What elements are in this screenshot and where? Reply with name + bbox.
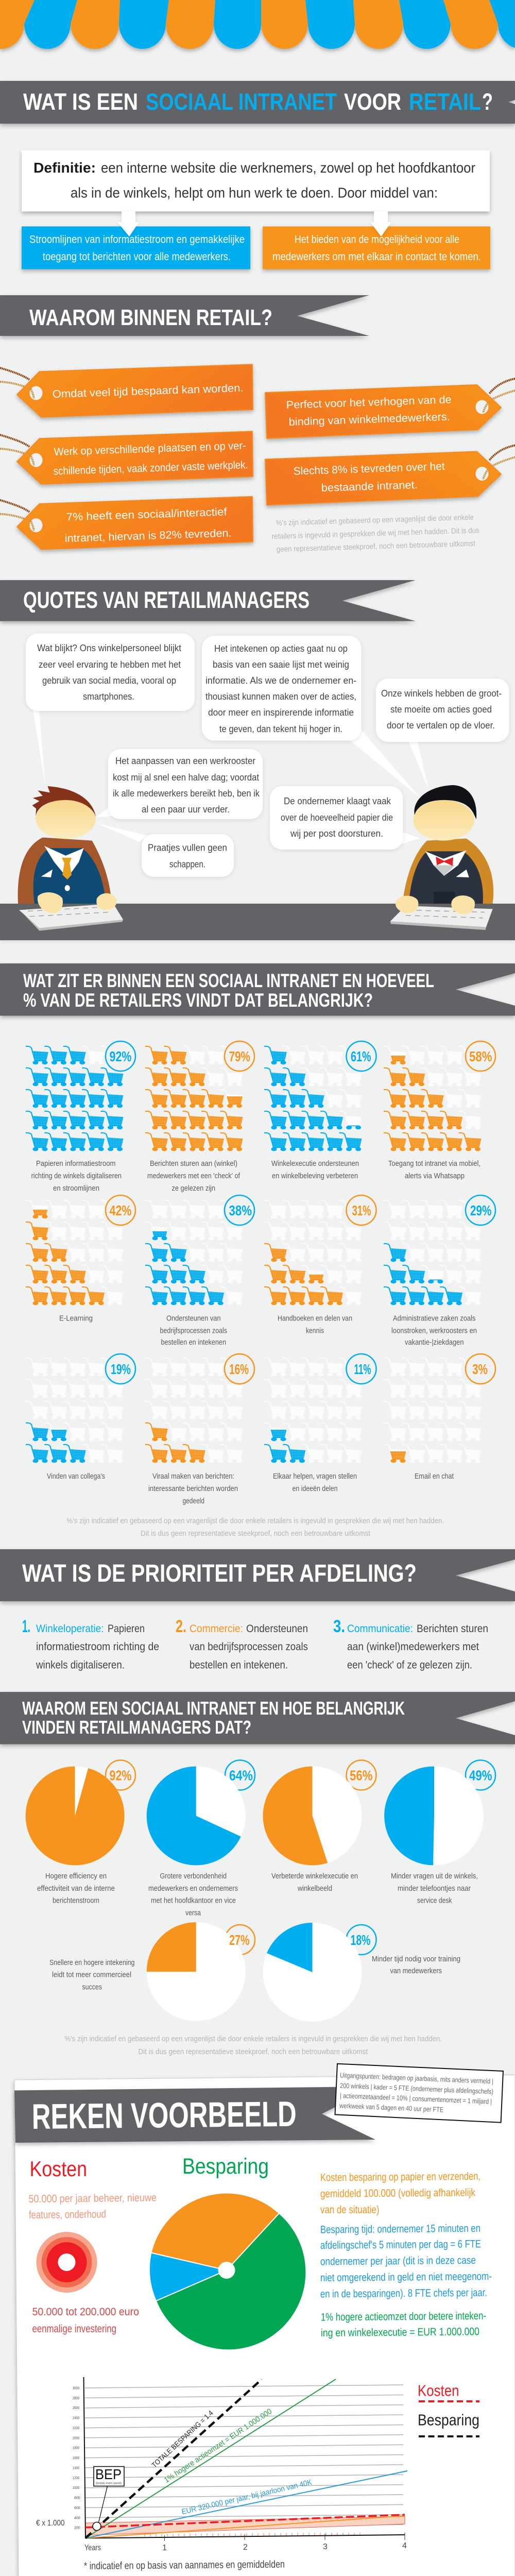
chart: break even: Years <box>84 2544 101 2552</box>
panel: elkaar helpen 11%: en ideeën delen <box>293 1484 338 1493</box>
priority 2: commercie: bestellen en intekenen. <box>190 1659 288 1671</box>
panel: administratieve zaken 29%: loonstroken, werkroosters en <box>391 1326 477 1335</box>
priority 3: communicatie: Communicatie: <box>347 1623 413 1635</box>
heading: wat is een sociaal intranet voor retail: ? <box>482 89 493 115</box>
pie: winkelexecutie 56%: 56% <box>350 1767 373 1784</box>
chart: break even: 1 <box>162 2544 167 2552</box>
panel: handboeken 31% <box>264 1195 376 1335</box>
priority 1: winkeloperatie: Papieren <box>108 1623 145 1635</box>
pie: verbondenheid 64%: versa <box>185 1908 201 1918</box>
panel: winkelexecutie 61%: en winkelbeleving verbeteren <box>272 1172 358 1180</box>
quote: papier: De ondernemer klaagt vaak <box>284 796 391 806</box>
pie: intekening 27%: Snellere en hogere intekening <box>49 1958 135 1967</box>
tag: 8 procent: Slechts 8% is tevreden over het <box>293 461 445 477</box>
quote: acties vertalen: Onze winkels hebben de groot- <box>381 688 502 699</box>
quote: intekenen: informatie. Als we de ondernemer en- <box>205 675 356 686</box>
quote: winkelpersoneel: Wat blijkt? Ons winkelpersoneel blijkt <box>37 643 181 653</box>
panel: contact: Het bieden van de mogelijkheid voor alle <box>295 234 459 245</box>
panel: vinden van collega's 19%: 19% <box>111 1361 131 1377</box>
priority 2: commercie: Ondersteunen <box>246 1623 308 1635</box>
panel: winkelexecutie 61%: Winkelexecutie ondersteunen <box>271 1159 359 1168</box>
quote: intekenen: door meer en inspirerende informatie <box>208 707 354 718</box>
callout: BEP <box>93 2466 124 2531</box>
heading: waarom binnen retail: WAAROM BINNEN RETAIL? <box>29 305 272 330</box>
column: kosten <box>28 2157 157 2335</box>
panel: handboeken 31%: Handboeken en delen van <box>278 1314 352 1323</box>
column: besparing pie: Besparing <box>182 2154 269 2179</box>
panel: bedrijfsprocessen 38% <box>145 1195 254 1347</box>
callout: BEP: BEP <box>95 2466 122 2482</box>
tag: tijd: Omdat veel tijd bespaard kan worden. <box>52 382 244 400</box>
legend: kosten / besparing: Besparing <box>418 2411 479 2429</box>
column: kosten: eenmalige investering <box>32 2323 116 2335</box>
arrow: left <box>117 211 139 236</box>
chart: break even: 1% hogere actieomzet = EUR 1.000.000 <box>163 2407 273 2485</box>
pie: winkelexecutie 56% <box>263 1760 376 1893</box>
chart: break even: 600 <box>74 2506 80 2510</box>
quote: intekenen <box>202 636 420 798</box>
priority 2: commercie <box>176 1617 308 1671</box>
panel: papieren informatiestroom 92%: richting de winkels digitaliseren <box>31 1172 122 1180</box>
pie: winkelexecutie 56%: winkelbeeld <box>297 1884 332 1893</box>
panel: administratieve zaken 29%: vakantie-|ziekdagen <box>405 1338 464 1347</box>
chart: break even: 1600 <box>73 2456 79 2460</box>
footnote: tags: geen representatieve steekproef, noch een betrouwbare uitkomst <box>277 539 476 554</box>
footnote: carts: Dit is dus geen representatieve steekproef, noch een betrouwbare uitkomst <box>141 1529 371 1538</box>
panel: winkelexecutie 61% <box>264 1041 376 1180</box>
panel: papieren informatiestroom 92%: en stroomlijnen <box>53 1184 99 1193</box>
panel: stroomlijnen: toegang tot berichten voor alle medewerkers. <box>43 251 231 263</box>
column: besparing pie <box>149 2154 306 2350</box>
heading: wat is een sociaal intranet voor retail: SOCIAAL INTRANET <box>146 89 337 115</box>
quote: acties vertalen: ste moeite om acties goed <box>390 704 492 715</box>
heading: wat is een sociaal intranet voor retail: WAT IS EEN <box>23 89 138 115</box>
panel: elkaar helpen 11%: Elkaar helpen, vragen stellen <box>273 1472 357 1481</box>
pie: efficiency 92% <box>26 1760 135 1905</box>
chart: break even: 2400 <box>73 2417 79 2420</box>
panel: reken voorbeeld sheet <box>14 2075 515 2576</box>
footnote: tags <box>272 513 479 554</box>
tag: 8 procent <box>265 445 515 505</box>
panel: viraal 16%: Viraal maken van berichten: <box>152 1472 234 1481</box>
quote: intekenen: Het intekenen op acties gaat nu op <box>214 643 348 654</box>
awning <box>0 0 515 49</box>
chart: break even <box>36 2377 407 2572</box>
panel: e-learning 42%: E-Learning <box>59 1314 93 1323</box>
panel: definitie: een interne website die werknemers, zowel op het hoofdkantoor <box>101 160 475 176</box>
chart: break even: 400 <box>74 2516 80 2520</box>
panel: contact: medewerkers om met elkaar in contact te komen. <box>272 251 481 263</box>
quote: winkelpersoneel: gebruik van social media, vooral op <box>42 675 176 686</box>
panel: papieren informatiestroom 92%: Papieren informatiestroom <box>36 1159 115 1168</box>
pie: minder vragen 49%: 49% <box>469 1767 492 1784</box>
footnote: carts: %'s zijn indicatief en gebaseerd op een vragenlijst die door enkele retailers is ingevuld in gesprekken die wij met hen hadden. <box>67 1517 444 1525</box>
panel: bedrijfsprocessen 38%: bedrijfsprocessen zoals <box>160 1326 227 1335</box>
tag: binding: Perfect voor het verhogen van de <box>286 394 452 411</box>
pie: minder vragen 49%: Minder vragen uit de winkels, <box>391 1872 478 1880</box>
heading: reken voorbeeld: REKEN VOORBEELD <box>31 2094 297 2137</box>
text: besparing tijd: ondernemer per jaar (dit is in deze case <box>320 2255 476 2267</box>
text: besparing tijd <box>320 2223 492 2300</box>
pie: efficiency 92%: effectiviteit van de interne <box>37 1884 115 1893</box>
chart: break even: * indicatief en op basis van aannames en gemiddelden <box>84 2559 285 2572</box>
footnote: pies: %'s zijn indicatief en gebaseerd op een vragenlijst die door enkele retailers is ingevuld in gesprekken die wij met hen hadden. <box>65 2035 442 2043</box>
panel: bedrijfsprocessen 38%: 38% <box>229 1202 252 1218</box>
footnote: tags: retailers is ingevuld in gesprekken die wij met hen hadden. Dit is dus <box>272 526 479 541</box>
panel: toegang mobiel 58%: 58% <box>469 1048 492 1064</box>
pie: minder vragen 49%: minder telefoontjes naar <box>398 1884 471 1893</box>
quote: acties vertalen <box>376 679 509 789</box>
pie: intekening 27%: 27% <box>229 1932 250 1948</box>
panel: elkaar helpen 11%: 11% <box>354 1361 371 1377</box>
quote: intekenen: thousiast kunnen maken over de acties, <box>205 691 356 702</box>
priority 3: communicatie: aan (winkel)medewerkers met <box>347 1641 479 1653</box>
panel: toegang mobiel 58%: Toegang tot intranet via mobiel, <box>388 1159 480 1168</box>
priority 2: commercie: 2. <box>176 1617 186 1636</box>
pie: verbondenheid 64%: medewerkers en ondernemers <box>148 1884 238 1893</box>
pie: intekening 27%: succes <box>82 1982 102 1992</box>
quote: winkelpersoneel <box>26 634 195 786</box>
person: right manager <box>390 785 493 930</box>
priority 1: winkeloperatie: 1. <box>22 1617 30 1636</box>
heading: wat is een sociaal intranet voor retail: VOOR <box>344 89 401 115</box>
tag: werkplek <box>0 431 253 484</box>
panel: definitie <box>22 150 490 211</box>
panel: toegang mobiel 58%: alerts via Whatsapp <box>405 1172 465 1180</box>
heading: waarom binnen retail <box>0 295 369 336</box>
tag: binding <box>265 379 515 438</box>
text: kostenbesparing: van de situatie) <box>320 2204 379 2216</box>
panel: viraal 16%: gedeeld <box>182 1497 204 1505</box>
arrow: right <box>370 211 391 236</box>
quote: werkrooster: Het aanpassen van een werkrooster <box>115 756 255 766</box>
tag: binding: binding van winkelmedewerkers. <box>288 411 450 428</box>
heading: waarom een sociaal intranet <box>0 1692 515 1744</box>
panel: viraal 16% <box>145 1354 254 1505</box>
footnote: carts <box>67 1517 444 1538</box>
tag: 7 procent: 7% heeft een sociaal/interactief <box>66 506 227 523</box>
panel: berichten sturen 79%: ze gelezen zijn <box>172 1184 215 1193</box>
panel: e-learning 42% <box>26 1195 135 1323</box>
callout: BEP: (break even point) <box>96 2482 122 2485</box>
heading: wat zit er binnen: % VAN DE RETAILERS VINDT DAT BELANGRIJK? <box>23 990 373 1011</box>
priority 3: communicatie <box>333 1617 488 1671</box>
quote: praatjes <box>97 823 234 877</box>
heading: quotes <box>0 580 416 621</box>
panel: vinden van collega's 19%: Vinden van collega's <box>47 1472 105 1481</box>
quote: intekenen: basis van een saaie lijst met weinig <box>213 659 349 670</box>
panel: administratieve zaken 29% <box>384 1195 495 1347</box>
column: kosten: 50.000 tot 200.000 euro <box>32 2306 139 2318</box>
quote: praatjes: Praatjes vullen geen <box>148 843 227 853</box>
pie: minder vragen 49% <box>384 1760 495 1905</box>
priority 2: commercie: van bedrijfsprocessen zoals <box>190 1641 308 1653</box>
panel: papieren informatiestroom 92% <box>26 1041 135 1193</box>
pie: minder vragen 49%: service desk <box>417 1896 452 1905</box>
heading: prioriteit per afdeling: WAT IS DE PRIORITEIT PER AFDELING? <box>22 1560 417 1587</box>
pie: training 18%: van medewerkers <box>390 1967 442 1975</box>
priority 1: winkeloperatie: Winkeloperatie: <box>36 1623 104 1635</box>
heading: prioriteit per afdeling <box>0 1549 515 1601</box>
text: actieomzet: ing en winkelexecutie = EUR 1.000.000 <box>321 2326 479 2339</box>
priority 3: communicatie: Berichten sturen <box>417 1623 488 1635</box>
panel: administratieve zaken 29%: 29% <box>470 1202 492 1218</box>
quote: papier <box>270 786 420 850</box>
quote: intekenen: te geven, dan tekent hij hoger in. <box>219 724 342 734</box>
icon: concentric cost circle <box>36 2232 97 2293</box>
chart: break even: 1000 <box>73 2486 79 2490</box>
chart: break even: 1800 <box>73 2447 79 2450</box>
quote: werkrooster: kost mij al snel een halve dag; voordat <box>113 772 259 783</box>
heading: wat is een sociaal intranet voor retail: RETAIL <box>409 89 481 115</box>
pie: efficiency 92%: Hogere efficiency en <box>45 1872 107 1880</box>
priority 2: commercie: Commercie: <box>190 1623 243 1635</box>
chart: break even: 3000 <box>73 2386 79 2391</box>
text: kostenbesparing <box>320 2171 480 2216</box>
chart: break even: 3 <box>323 2543 328 2551</box>
quote: papier: over de hoeveelheid papier die <box>281 812 393 823</box>
chart: break even: 200 <box>74 2527 80 2530</box>
footnote: tags: %'s zijn indicatief en gebaseerd op een vragenlijst die door enkele <box>276 513 474 528</box>
chart: break even: 2600 <box>73 2406 79 2410</box>
pie: verbondenheid 64% <box>147 1760 255 1918</box>
priority 1: winkeloperatie: informatiestroom richting de <box>36 1641 159 1653</box>
desk <box>0 904 515 940</box>
panel: administratieve zaken 29%: Administratieve zaken zoals <box>393 1314 476 1323</box>
note: uitgangspunten <box>335 2064 503 2123</box>
footnote: pies: Dit is dus geen representatieve steekproef, noch een betrouwbare uitkomst <box>138 2047 368 2056</box>
pie: winkelexecutie 56%: Verbeterde winkelexecutie en <box>271 1872 358 1880</box>
tag: werkplek: schillende tijden, vaak zonder vaste werkplek. <box>53 459 248 477</box>
panel: berichten sturen 79%: 79% <box>229 1048 250 1064</box>
pie: efficiency 92%: berichtenstroom <box>53 1896 99 1905</box>
panel: vinden van collega's 19% <box>26 1354 135 1481</box>
panel: handboeken 31%: 31% <box>352 1202 371 1218</box>
priority 1: winkeloperatie: winkels digitaliseren. <box>36 1659 125 1671</box>
pie: intekening 27% <box>49 1922 255 2021</box>
person: left manager <box>18 786 123 931</box>
chart: break even: € x 1.000 <box>36 2519 65 2528</box>
panel: handboeken 31%: kennis <box>306 1326 324 1335</box>
heading: wat zit er binnen <box>0 963 515 1016</box>
note: uitgangspunten: werkweek van 5 dagen en 40 uur per FTE <box>339 2102 443 2114</box>
panel: bedrijfsprocessen 38%: Ondersteunen van <box>166 1314 220 1323</box>
text: kostenbesparing: gemiddeld 100.000 (volledig afhankelijk <box>320 2187 475 2200</box>
chart: break even: 2800 <box>73 2397 79 2400</box>
panel: e-learning 42%: 42% <box>109 1202 132 1218</box>
column: kosten: 50.000 per jaar beheer, nieuwe <box>28 2192 157 2205</box>
chart: break even: 2 <box>243 2543 248 2552</box>
quote: praatjes: schappen. <box>169 859 205 870</box>
priority 3: communicatie: een 'check' of ze gelezen zijn. <box>347 1659 472 1671</box>
panel: contact <box>263 227 490 269</box>
column: kosten: Kosten <box>30 2157 87 2181</box>
chart: break even: 2000 <box>73 2436 79 2440</box>
tag: 7 procent <box>0 497 253 549</box>
heading: wat is een sociaal intranet voor retail <box>0 81 515 124</box>
tag: 7 procent: intranet, hiervan is 82% tevreden. <box>64 527 232 545</box>
pie: efficiency 92%: 92% <box>109 1767 132 1784</box>
quote: winkelpersoneel: smartphones. <box>83 691 134 702</box>
quote: winkelpersoneel: zeer veel ervaring te hebben met het <box>39 659 181 670</box>
panel: elkaar helpen 11% <box>264 1354 376 1493</box>
panel: definitie: Definitie: <box>33 160 96 176</box>
chart: break even: 2200 <box>73 2427 79 2430</box>
legend: kosten / besparing <box>418 2381 479 2436</box>
quote: werkrooster: ik alle medewerkers bereikt heb, ben ik <box>113 788 260 799</box>
text: actieomzet <box>321 2310 486 2339</box>
quote: papier: wij per post doorsturen. <box>290 828 383 839</box>
chart: break even: 800 <box>74 2497 80 2500</box>
quote: acties vertalen: door te vertalen op de vloer. <box>387 720 495 731</box>
chart: break even: EUR 320.000 per jaar, bij jaarloon van 40K <box>181 2478 313 2516</box>
panel: bedrijfsprocessen 38%: bestellen en intekenen <box>161 1338 226 1347</box>
heading: quotes: QUOTES VAN RETAILMANAGERS <box>23 587 310 613</box>
panel: papieren informatiestroom 92%: 92% <box>109 1048 132 1064</box>
legend: kosten / besparing: Kosten <box>418 2381 459 2400</box>
chart: break even: 1200 <box>73 2477 79 2480</box>
panel: toegang mobiel 58% <box>384 1041 495 1180</box>
pie: training 18% <box>263 1923 460 2022</box>
footnote: pies <box>65 2035 442 2056</box>
panel: stroomlijnen: Stroomlijnen van informatiestroom en gemakkelijke <box>29 234 245 245</box>
panel: definitie: als in de winkels, helpt om hun werk te doen. Door middel van: <box>71 184 438 201</box>
chart: break even: TOTALE BESPARING = 1.4 <box>150 2409 215 2469</box>
pie: verbondenheid 64%: met het hoofdkantoor en vice <box>151 1896 236 1905</box>
heading: waarom een sociaal intranet: VINDEN RETAILMANAGERS DAT? <box>22 1717 251 1738</box>
priority 1: winkeloperatie <box>22 1617 159 1671</box>
chart: break even: 1400 <box>73 2466 79 2470</box>
tag: 8 procent: bestaande intranet. <box>321 479 418 494</box>
panel: winkelexecutie 61%: 61% <box>351 1048 371 1064</box>
panel: viraal 16%: interessante berichten worden <box>148 1484 238 1493</box>
panel: email en chat 3%: 3% <box>472 1361 488 1377</box>
pie: training 18%: 18% <box>350 1932 371 1948</box>
tag: werkplek: Werk op verschillende plaatsen en op ver- <box>54 440 246 458</box>
panel: stroomlijnen <box>22 227 250 269</box>
pie: verbondenheid 64%: Grotere verbondenheid <box>160 1872 227 1880</box>
chart: break even: 4 <box>402 2541 407 2550</box>
tag: tijd <box>0 364 253 417</box>
quote: werkrooster <box>96 749 263 819</box>
panel: berichten sturen 79% <box>145 1041 254 1193</box>
panel: email en chat 3% <box>384 1354 495 1481</box>
pie: training 18%: Minder tijd nodig voor training <box>372 1955 460 1963</box>
panel: berichten sturen 79%: Berichten sturen aan (winkel) <box>150 1159 237 1168</box>
column: kosten: features, onderhoud <box>29 2208 106 2221</box>
pie: verbondenheid 64%: 64% <box>229 1767 253 1784</box>
priority 3: communicatie: 3. <box>333 1617 345 1636</box>
panel: email en chat 3%: Email en chat <box>415 1472 454 1481</box>
quote: werkrooster: al een paar uur verder. <box>142 804 230 815</box>
panel: berichten sturen 79%: medewerkers met een 'check' of <box>147 1172 241 1180</box>
panel: viraal 16%: 16% <box>229 1361 249 1377</box>
pie: intekening 27%: leidt tot meer commercieel <box>52 1970 131 1979</box>
